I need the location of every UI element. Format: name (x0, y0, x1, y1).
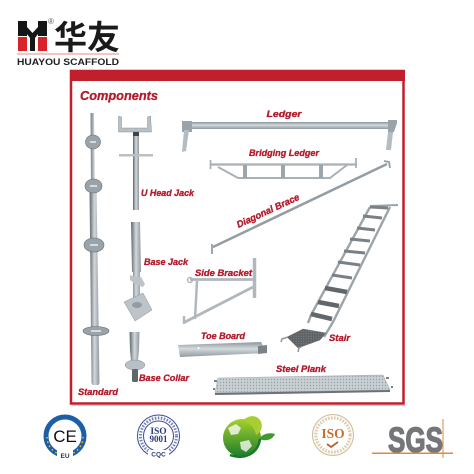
label: U Head Jack: U Head Jack (141, 188, 195, 199)
registered mark: ® (48, 17, 54, 26)
icon: HY mark (18, 21, 47, 51)
label: Base Jack: Base Jack (144, 257, 189, 268)
icon: SGS logo: SGS (388, 421, 443, 460)
icon: ISO certification seal: ISO (321, 426, 345, 441)
panel: components frame (70, 70, 405, 406)
icon: CE EU certification (46, 417, 84, 460)
label: Side Bracket: Side Bracket (195, 268, 253, 279)
icon: CE EU certification: EU (60, 453, 70, 460)
icon: ISO 9001 CQC certification: ISO (150, 427, 167, 437)
part: ledger (182, 120, 397, 152)
logo Chinese name: 华友 (54, 19, 120, 56)
icon: ISO 9001 CQC certification: CQC (151, 452, 166, 458)
part: bridging ledger (210, 158, 357, 178)
label: Standard: Standard (78, 387, 118, 398)
icon: SGS logo (372, 419, 453, 460)
icon: ISO 9001 CQC certification (138, 415, 180, 458)
icon: green globe with leaf (223, 416, 275, 457)
label: Bridging Ledger: Bridging Ledger (249, 148, 320, 159)
logo: Huayou Scaffold (17, 17, 120, 67)
icon: CE EU certification: CE (53, 427, 77, 446)
part: stair (281, 205, 398, 352)
heading: Components: Components (80, 88, 158, 103)
part: U head jack (118, 116, 153, 210)
part: diagonal brace (212, 161, 390, 254)
part: toe board (178, 342, 267, 357)
label: Base Collar: Base Collar (139, 373, 190, 384)
part: base collar (125, 332, 145, 382)
logo English name: HUAYOU SCAFFOLD (17, 57, 120, 67)
icon: ISO 9001 CQC certification: 9001 (150, 434, 168, 444)
label: Toe Board: Toe Board (201, 331, 245, 342)
label: Steel Plank: Steel Plank (276, 364, 327, 375)
label: Ledger: Ledger (266, 109, 303, 120)
part: side bracket (184, 258, 254, 324)
part: base jack (124, 222, 152, 321)
label: Stair: Stair (329, 333, 351, 344)
icon: ISO certification seal (312, 414, 354, 456)
part: standard (83, 113, 109, 385)
label: Diagonal Brace: Diagonal Brace (235, 192, 302, 231)
part: steel plank (213, 375, 393, 395)
